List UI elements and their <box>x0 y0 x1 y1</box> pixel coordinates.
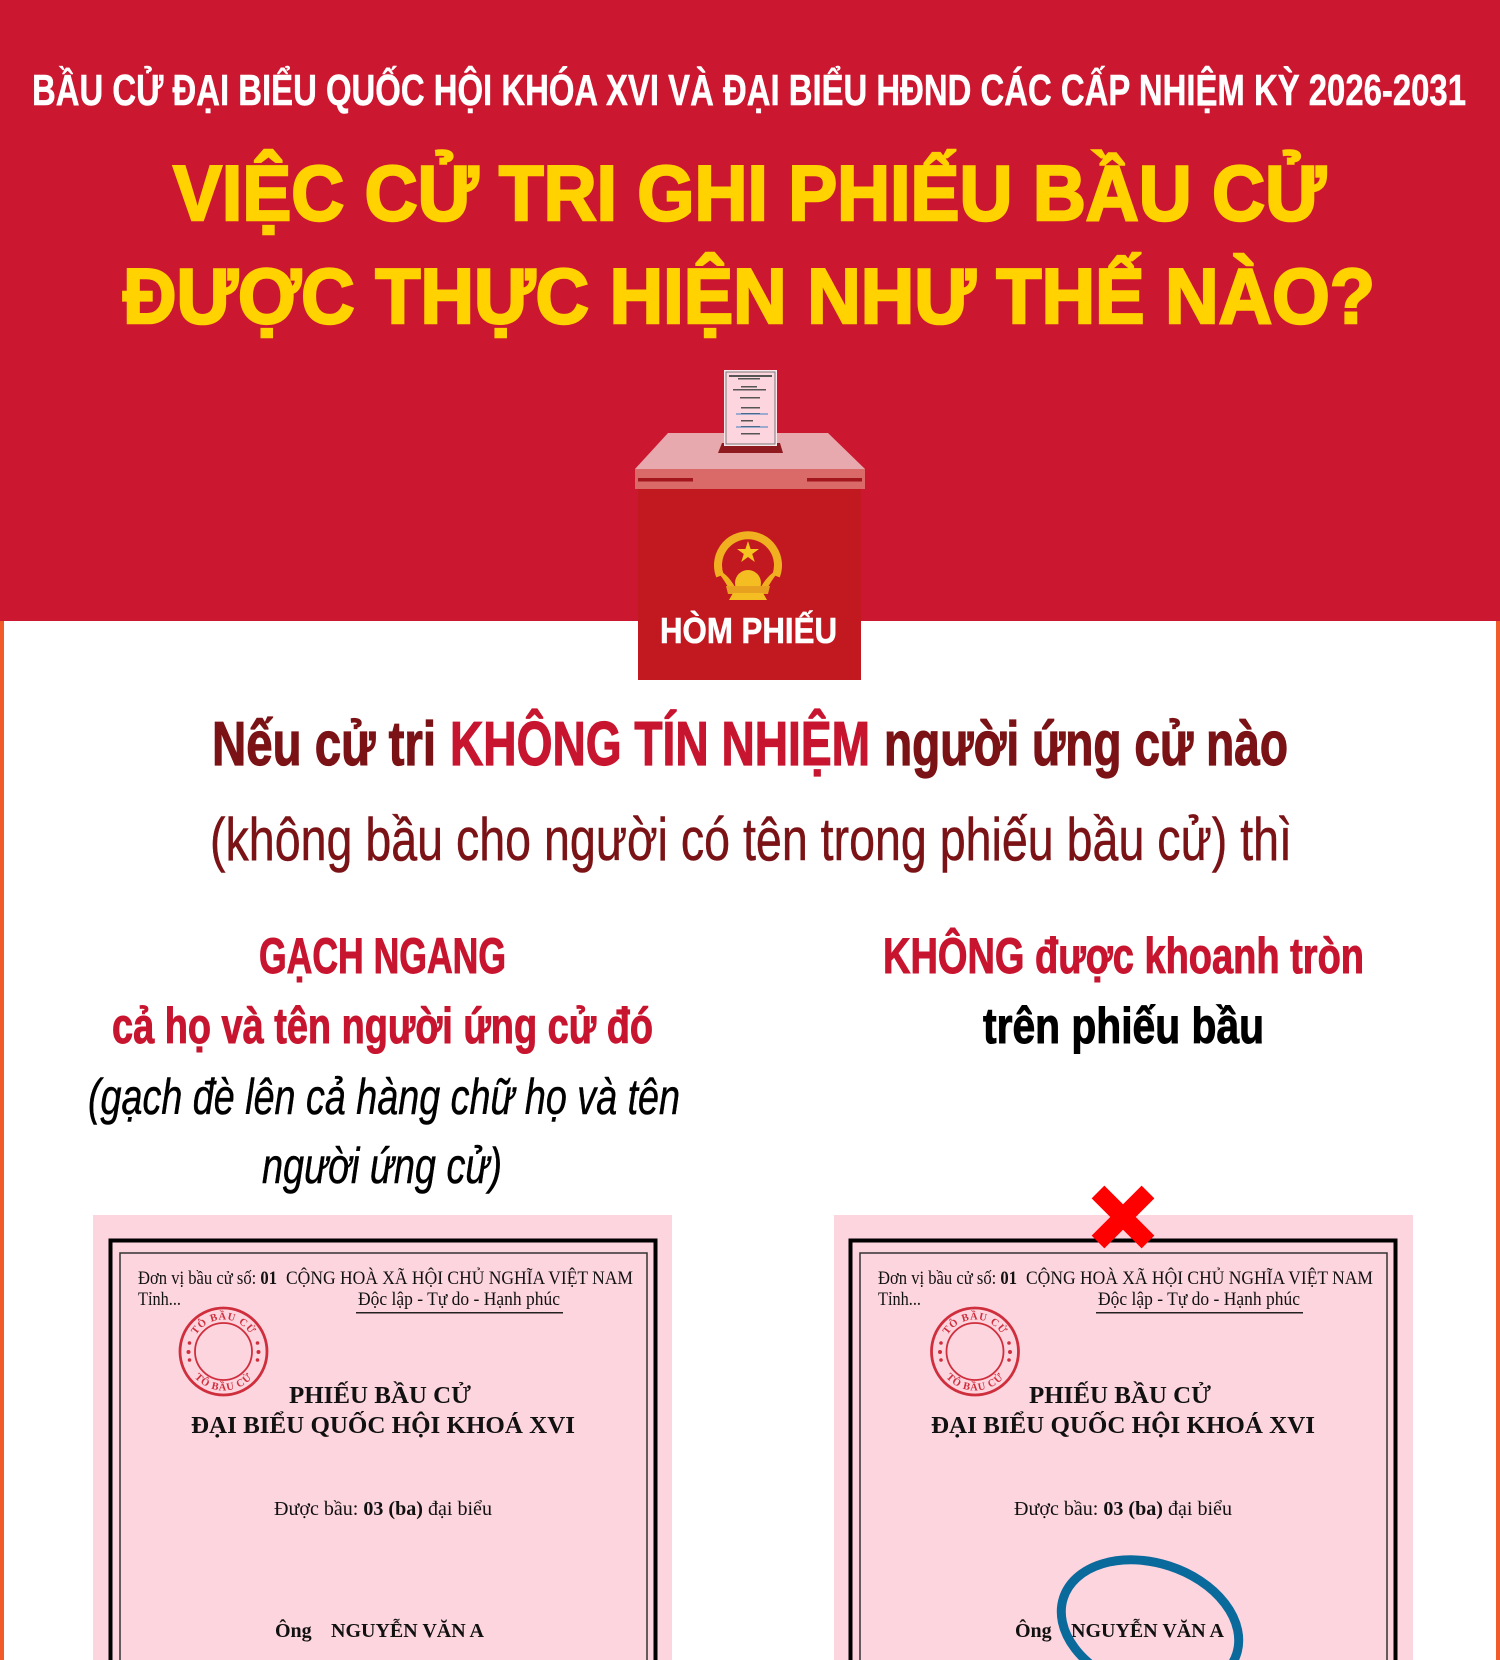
right instruction <box>883 927 1364 1054</box>
ballot title: PHIẾU BẦU CỬ <box>1029 1382 1211 1409</box>
main title <box>123 149 1375 340</box>
left instruction: (gạch đè lên cả hàng chữ họ và tên <box>88 1069 680 1125</box>
heading: condition line: người ứng cử nào <box>884 710 1288 779</box>
ballot header text: Độc lập - Tự do - Hạnh phúc <box>358 1290 560 1310</box>
main title: ĐƯỢC THỰC HIỆN NHƯ THẾ NÀO? <box>123 252 1375 340</box>
panel: left ballot <box>93 1215 672 1660</box>
left instruction: người ứng cử) <box>262 1138 502 1194</box>
icon: ballot box <box>635 370 865 680</box>
candidate: Ông <box>1015 1618 1052 1642</box>
ballot title <box>191 1382 575 1439</box>
icon: national emblem <box>716 535 780 600</box>
side borders <box>0 621 1500 1660</box>
candidate: NGUYỄN VĂN A <box>1071 1617 1225 1642</box>
right instruction: KHÔNG được khoanh tròn <box>883 927 1364 984</box>
ballot paper in slot <box>724 370 777 446</box>
panel: right ballot <box>834 1215 1413 1660</box>
stamp: TÔ BẦU CỬ <box>190 1310 256 1334</box>
ballot header text: Đơn vị bầu cử số: 01 <box>878 1269 1017 1289</box>
stamp: TÔ BẦU CỬ <box>196 1372 250 1390</box>
ballot header text: Độc lập - Tự do - Hạnh phúc <box>1098 1290 1300 1310</box>
ballot title: ĐẠI BIỂU QUỐC HỘI KHOÁ XVI <box>191 1412 575 1439</box>
ballot header text: CỘNG HOÀ XÃ HỘI CHỦ NGHĨA VIỆT NAM <box>286 1267 633 1289</box>
ballot header text: CỘNG HOÀ XÃ HỘI CHỦ NGHĨA VIỆT NAM <box>1026 1267 1373 1289</box>
ballot header text: Đơn vị bầu cử số: 01 <box>138 1269 277 1289</box>
ballot title <box>931 1382 1315 1439</box>
box label: HÒM PHIẾU <box>660 609 837 651</box>
candidate <box>275 1617 485 1642</box>
left instruction: cả họ và tên người ứng cử đó <box>112 998 653 1054</box>
icon: red cross <box>1098 1192 1148 1242</box>
box body <box>638 489 861 680</box>
ballot title: ĐẠI BIỂU QUỐC HỘI KHOÁ XVI <box>931 1412 1315 1439</box>
heading: condition line: Nếu cử tri <box>212 710 436 779</box>
quota: Được bầu: 03 (ba) đại biểu <box>1014 1499 1232 1520</box>
left instruction: GẠCH NGANG <box>259 928 506 984</box>
blue circle around name <box>1044 1538 1256 1660</box>
heading: condition line: KHÔNG TÍN NHIỆM <box>450 710 870 779</box>
stamp <box>178 1306 268 1396</box>
red header banner <box>0 0 1500 621</box>
stamp: TÔ BẦU CỬ <box>947 1372 1002 1390</box>
main title: VIỆC CỬ TRI GHI PHIẾU BẦU CỬ <box>173 149 1326 237</box>
heading: condition line <box>212 710 1288 779</box>
right instruction: trên phiếu bầu <box>983 998 1264 1054</box>
candidate: NGUYỄN VĂN A <box>331 1617 485 1642</box>
ballot title: PHIẾU BẦU CỬ <box>289 1382 471 1409</box>
ballot header text: Tỉnh... <box>878 1290 921 1310</box>
quota: Được bầu: 03 (ba) đại biểu <box>274 1499 492 1520</box>
stamp: TÔ BẦU CỬ <box>942 1310 1008 1334</box>
ballot header text <box>138 1267 633 1310</box>
stamp <box>930 1306 1020 1396</box>
candidate <box>1015 1617 1225 1642</box>
left instruction <box>88 928 680 1194</box>
ballot header text: Tỉnh... <box>138 1290 181 1310</box>
ballot header text <box>878 1267 1373 1310</box>
box lid <box>635 433 865 489</box>
candidate: Ông <box>275 1618 312 1642</box>
